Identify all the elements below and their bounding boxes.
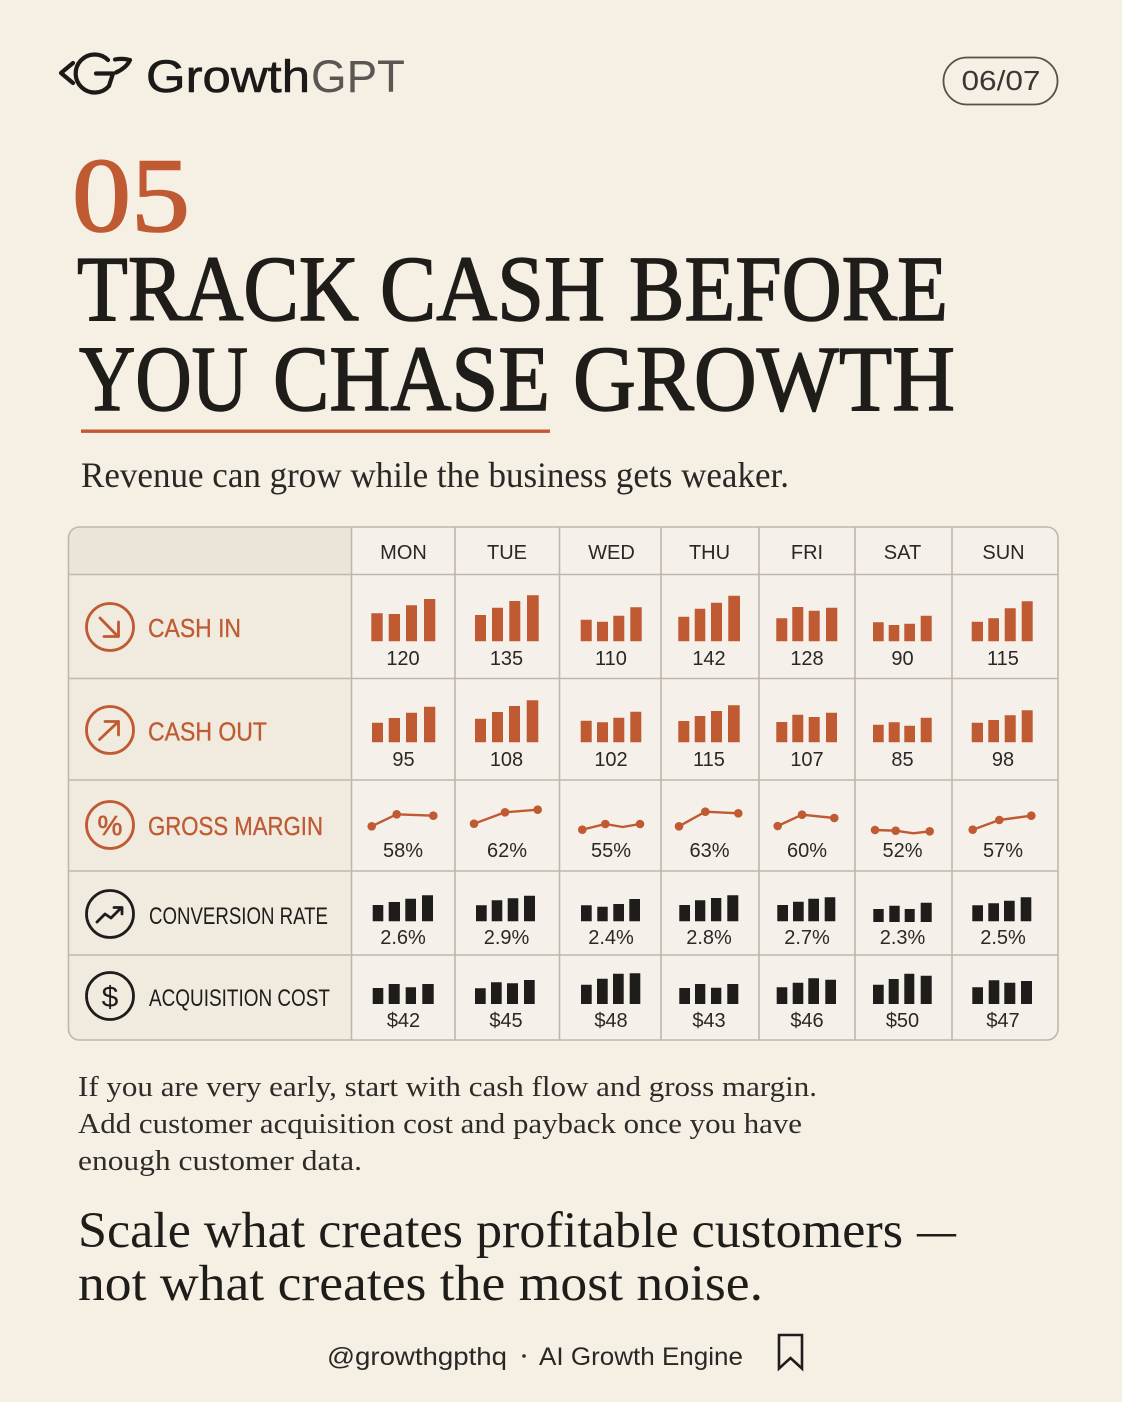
title: YOU — [79, 328, 248, 431]
table header: days: WED — [588, 542, 635, 564]
cell: Sun cash out — [972, 710, 1033, 771]
body text: Add customer acquisition cost and payback once you have — [78, 1108, 802, 1140]
cell: Fri conversion — [777, 897, 835, 949]
cell: Mon cash in — [371, 599, 435, 670]
cell: Wed acquisition — [581, 973, 640, 1032]
cell: Sun cash out: 98 — [992, 749, 1014, 771]
subtitle: Revenue can grow while the business gets weaker. — [81, 455, 789, 495]
cell: Thu cash out: 115 — [693, 749, 725, 771]
cell: Tue margin — [470, 805, 542, 862]
cell: Sat conversion — [873, 903, 932, 949]
wordmark: Growth — [146, 51, 310, 102]
cell: Thu margin — [675, 807, 743, 862]
cell: Sat cash out — [873, 718, 932, 771]
title — [77, 238, 955, 431]
row label: CASH IN — [148, 613, 241, 643]
body text — [78, 1071, 817, 1177]
icon: percent — [86, 802, 134, 848]
table header: days: MON — [380, 542, 427, 564]
cell: Wed conversion: 2.4% — [588, 927, 634, 949]
cell: Sun acquisition — [972, 980, 1032, 1032]
footer tagline: AI Growth Engine — [539, 1343, 743, 1371]
cell: Sun margin — [968, 811, 1036, 862]
cell: Sat cash in: 90 — [891, 648, 914, 670]
row: gross margin — [86, 802, 1036, 862]
row label: CASH OUT — [148, 716, 267, 746]
cell: Wed cash in — [581, 607, 642, 670]
section number: 05 — [72, 137, 190, 254]
cell: Mon cash out: 95 — [392, 749, 415, 771]
cell: Sun margin: 57% — [983, 840, 1023, 862]
cell: Sat cash in — [873, 616, 932, 670]
logo: GrowthGPT: GPT — [311, 51, 405, 102]
cell: Thu acquisition — [679, 984, 738, 1032]
cell: Fri margin: 60% — [787, 840, 827, 862]
body text: If you are very early, start with cash flow and gross margin. — [78, 1071, 817, 1103]
row label: ACQUISITION COST — [149, 985, 330, 1012]
icon: arrow down right — [86, 604, 134, 650]
cell: Sun acquisition: $47 — [986, 1010, 1020, 1032]
cell: Sat cash out: 85 — [891, 749, 914, 771]
icon: dollar: $ — [102, 981, 119, 1014]
page counter pill: 06/07 — [962, 65, 1040, 96]
cell: Mon cash out — [372, 707, 435, 771]
cell: Sat margin — [871, 826, 934, 862]
title underline — [81, 430, 550, 433]
cell: Mon acquisition: $42 — [387, 1010, 420, 1032]
cell: Thu cash out — [678, 705, 740, 771]
icon: orbit G mark — [61, 55, 130, 93]
cell: Wed cash in: 110 — [595, 648, 627, 670]
cell: Thu margin: 63% — [689, 840, 730, 862]
cell: Sat acquisition: $50 — [886, 1010, 919, 1032]
body text: enough customer data. — [78, 1145, 362, 1177]
cell: Tue acquisition — [475, 980, 535, 1032]
cell: Tue cash in: 135 — [490, 648, 523, 670]
cell: Tue cash out — [475, 700, 538, 771]
cell: Mon cash in: 120 — [386, 648, 420, 670]
cell: Mon conversion — [373, 895, 433, 949]
cell: Sun cash in: 115 — [987, 648, 1019, 670]
cell: Fri cash out: 107 — [790, 749, 824, 771]
table header: days: TUE — [487, 542, 527, 564]
cell: Sat conversion: 2.3% — [880, 927, 926, 949]
cell: Fri acquisition — [777, 978, 836, 1032]
closing statement — [78, 1203, 957, 1312]
cell: Mon conversion: 2.6% — [380, 927, 426, 949]
title: TRACK — [77, 238, 359, 341]
cell: Fri margin — [773, 810, 839, 862]
cell: Tue conversion — [476, 896, 535, 949]
cell: Wed margin — [578, 820, 644, 862]
title: BEFORE — [629, 238, 948, 341]
cell: Wed conversion — [581, 899, 640, 949]
row: acquisition cost — [86, 972, 1032, 1032]
cell: Thu cash in — [678, 596, 740, 670]
cell: Tue margin: 62% — [487, 840, 527, 862]
closing statement: Scale what creates profitable customers — [78, 1203, 903, 1259]
cell: Thu conversion: 2.8% — [686, 927, 732, 949]
cell: Thu conversion — [679, 895, 738, 949]
cell: Thu cash in: 142 — [692, 648, 726, 670]
title: GROWTH — [573, 328, 955, 431]
table header: days: FRI — [791, 542, 823, 564]
cell: Tue acquisition: $45 — [489, 1010, 523, 1032]
cell: Wed cash out — [581, 712, 641, 771]
title: CHASE — [273, 328, 550, 431]
cell: Fri cash out — [776, 713, 837, 771]
icon: arrow up right — [86, 706, 134, 754]
table header: days: SUN — [982, 542, 1025, 564]
cell: Fri conversion: 2.7% — [784, 927, 830, 949]
cell: Sat acquisition — [873, 974, 932, 1032]
panel: weekly metrics table — [68, 527, 1058, 1040]
page counter pill — [944, 58, 1058, 104]
cell: Mon margin: 58% — [383, 840, 423, 862]
row: cash out — [86, 700, 1033, 771]
cell: Wed margin: 55% — [591, 840, 631, 862]
cell: Mon acquisition — [373, 984, 434, 1032]
cell: Tue cash out: 108 — [490, 749, 523, 771]
icon: dollar — [86, 972, 134, 1020]
cell: Sun cash in — [972, 601, 1033, 670]
cell: Wed acquisition: $48 — [594, 1010, 628, 1032]
cell: Sat margin: 52% — [882, 840, 923, 862]
cell: Tue cash in — [475, 595, 539, 670]
row label: GROSS MARGIN — [148, 811, 323, 841]
cell: Wed cash out: 102 — [594, 749, 628, 771]
row: conversion rate — [86, 890, 1031, 949]
closing statement: not what creates the most noise. — [78, 1256, 763, 1312]
cell: Tue conversion: 2.9% — [484, 927, 530, 949]
cell: Fri acquisition: $46 — [790, 1010, 824, 1032]
table header: days — [380, 542, 1025, 564]
footer — [327, 1335, 802, 1371]
row: cash in — [86, 595, 1033, 670]
cell: Mon margin — [367, 810, 438, 862]
cell: Sun conversion — [972, 897, 1031, 949]
cell: Thu acquisition: $43 — [692, 1010, 726, 1032]
icon: bookmark — [779, 1335, 802, 1368]
footer handle: @growthgpthq — [327, 1343, 507, 1371]
cell: Fri cash in — [776, 607, 837, 670]
row label: CONVERSION RATE — [149, 903, 328, 930]
cell: Fri cash in: 128 — [790, 648, 824, 670]
logo: GrowthGPT — [61, 51, 405, 102]
cell: Sun conversion: 2.5% — [980, 927, 1026, 949]
closing statement: — — [916, 1203, 957, 1259]
footer separator — [522, 1354, 526, 1358]
icon: trend arrow — [86, 890, 134, 938]
table header: days: SAT — [884, 542, 921, 564]
table header: days: THU — [689, 542, 730, 564]
title: CASH — [380, 238, 605, 341]
icon: percent: % — [98, 810, 122, 841]
